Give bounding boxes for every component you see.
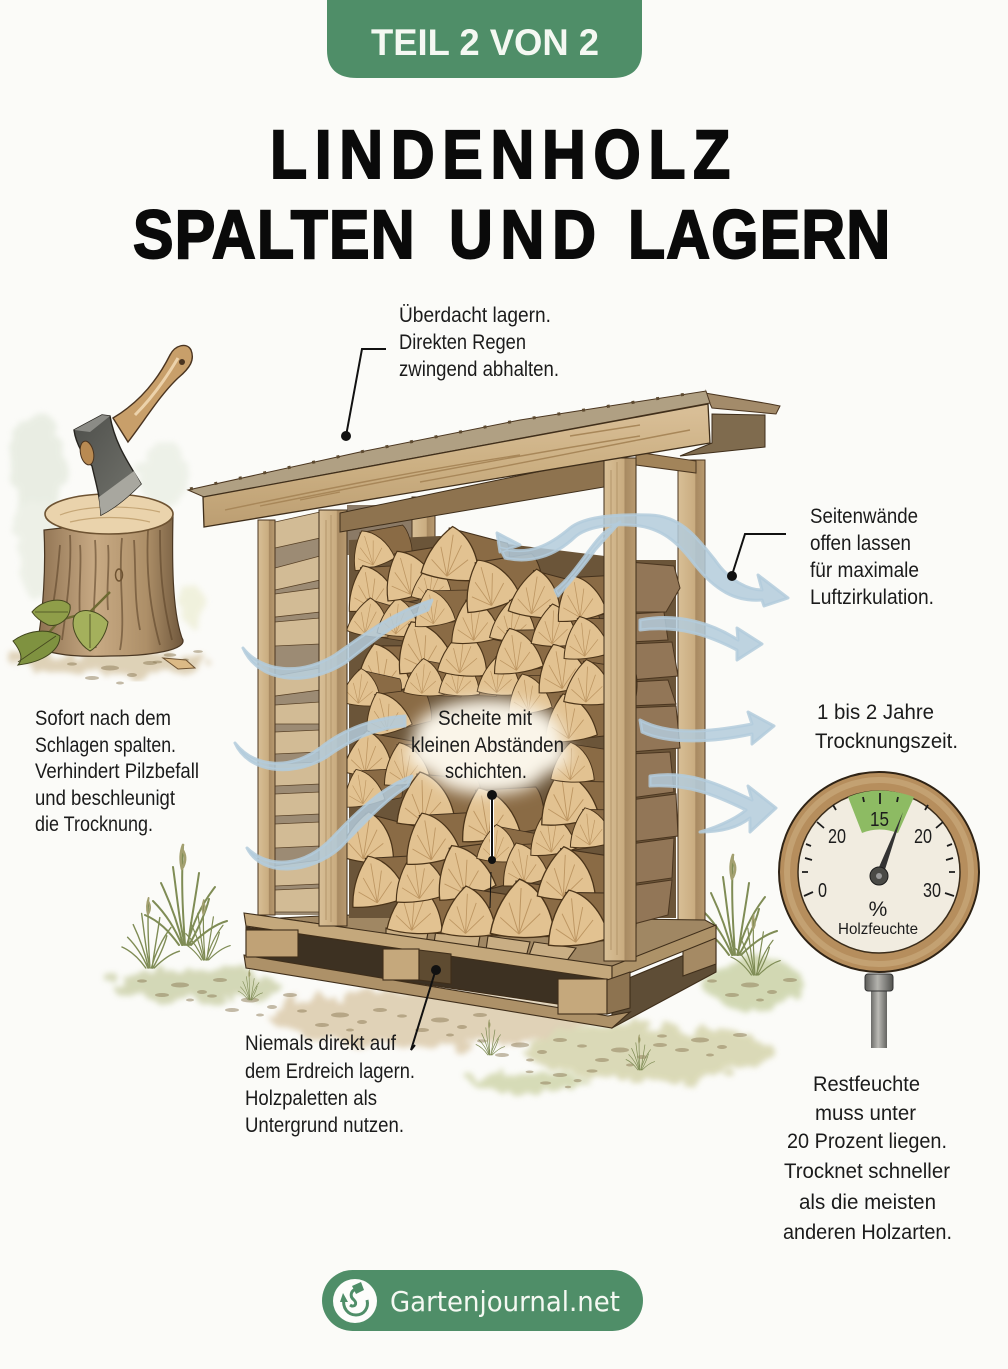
- side cross beam: [636, 452, 696, 473]
- callout: stacking: Scheite mit: [438, 707, 532, 730]
- callout: pallet: Holzpaletten als: [245, 1087, 377, 1110]
- gauge numbers: 30: [923, 880, 941, 902]
- callout: stacking: kleinen Abständen: [411, 734, 564, 757]
- leader lines: [341, 349, 786, 1050]
- callout: side walls: Luftzirkulation.: [810, 586, 934, 609]
- moisture gauge: [779, 772, 979, 1048]
- callout: split immediately: Verhindert Pilzbefall: [35, 760, 199, 783]
- footer logo pill: Gartenjournal.net: [390, 1285, 620, 1318]
- gauge needle: [870, 812, 903, 885]
- gauge numbers: 15: [870, 809, 889, 831]
- title: SPALTEN: [133, 195, 415, 273]
- roof: [188, 391, 780, 532]
- pile backing: [349, 536, 676, 918]
- green zone: [848, 790, 914, 833]
- left slat wall: [275, 512, 321, 915]
- illustration: ground and grass: [110, 845, 805, 1091]
- illustration: axe in chopping block: [10, 345, 210, 684]
- text halo: [406, 699, 570, 794]
- airflow: left middle: [235, 716, 405, 770]
- airflow: right middle: [640, 712, 774, 744]
- title: UND: [449, 195, 596, 273]
- gauge numbers: 20: [914, 826, 932, 848]
- callout: roof: zwingend abhalten.: [399, 358, 559, 381]
- left front post: [319, 510, 347, 926]
- callout: split immediately: Schlagen spalten.: [35, 734, 176, 757]
- callout: split immediately: die Trocknung.: [35, 813, 153, 836]
- gauge numbers: Holzfeuchte: [838, 921, 918, 938]
- airflow: top right: [497, 515, 788, 606]
- callout: residual moisture: [783, 1073, 952, 1244]
- callout: residual moisture: 20 Prozent liegen.: [787, 1130, 947, 1153]
- footer logo pill: [322, 1270, 643, 1331]
- callout: roof: Direkten Regen: [399, 331, 526, 354]
- airflow: right lower: [650, 775, 776, 832]
- airflow: left lower: [247, 776, 412, 869]
- gauge ticks: [802, 793, 955, 896]
- gauge numbers: [818, 809, 941, 938]
- badge: Teil 2 von 2: TEIL 2 VON 2: [371, 22, 599, 63]
- title: [133, 115, 890, 273]
- title: LINDENHOLZ: [270, 115, 730, 193]
- callout: side walls: für maximale: [810, 559, 919, 582]
- callout: stacking: [411, 707, 564, 783]
- callout: pallet: [245, 1032, 415, 1137]
- inner back post and boards: [347, 497, 435, 555]
- callout: drying time: Trocknungszeit.: [815, 730, 958, 753]
- callout: residual moisture: Trocknet schneller: [784, 1160, 950, 1183]
- right front post: [604, 458, 636, 961]
- airflow arrows: [235, 515, 788, 869]
- callout: drying time: 1 bis 2 Jahre: [817, 701, 934, 724]
- gauge stem: [865, 974, 893, 1048]
- callout: residual moisture: als die meisten: [799, 1191, 936, 1214]
- callout: split immediately: und beschleunigt: [35, 787, 175, 810]
- airflow: cross stream: [555, 522, 620, 596]
- pallet: [244, 913, 716, 1028]
- callout: residual moisture: anderen Holzarten.: [783, 1221, 952, 1244]
- airflow: right upper: [640, 618, 762, 660]
- callout: stacking: schichten.: [445, 760, 527, 783]
- gauge numbers: %: [869, 898, 887, 921]
- badge: Teil 2 von 2: [327, 0, 642, 78]
- callout: residual moisture: muss unter: [815, 1102, 916, 1125]
- callout: residual moisture: Restfeuchte: [813, 1073, 920, 1096]
- split logs: [338, 519, 639, 947]
- callout: roof: [399, 304, 559, 381]
- callout: side walls: Seitenwände: [810, 505, 918, 528]
- right-hand log ends: [630, 562, 680, 925]
- callout: pallet: Untergrund nutzen.: [245, 1114, 404, 1137]
- back right post: [678, 460, 705, 928]
- callout: roof: Überdacht lagern.: [399, 304, 551, 327]
- callout: split immediately: [35, 707, 199, 836]
- callout: side walls: offen lassen: [810, 532, 911, 555]
- callout: split immediately: Sofort nach dem: [35, 707, 171, 730]
- left back post: [258, 520, 275, 915]
- callout: side walls: [810, 505, 934, 609]
- icon: garden logo: [333, 1279, 377, 1323]
- illustration: wood shed: [188, 391, 780, 1028]
- callout: pallet: dem Erdreich lagern.: [245, 1060, 415, 1083]
- callout: pallet: Niemals direkt auf: [245, 1032, 396, 1055]
- title: LAGERN: [628, 195, 890, 273]
- callout: drying time: [815, 701, 958, 753]
- airflow: left top: [243, 600, 432, 678]
- gauge numbers: 20: [828, 826, 846, 848]
- gauge numbers: 0: [818, 880, 827, 902]
